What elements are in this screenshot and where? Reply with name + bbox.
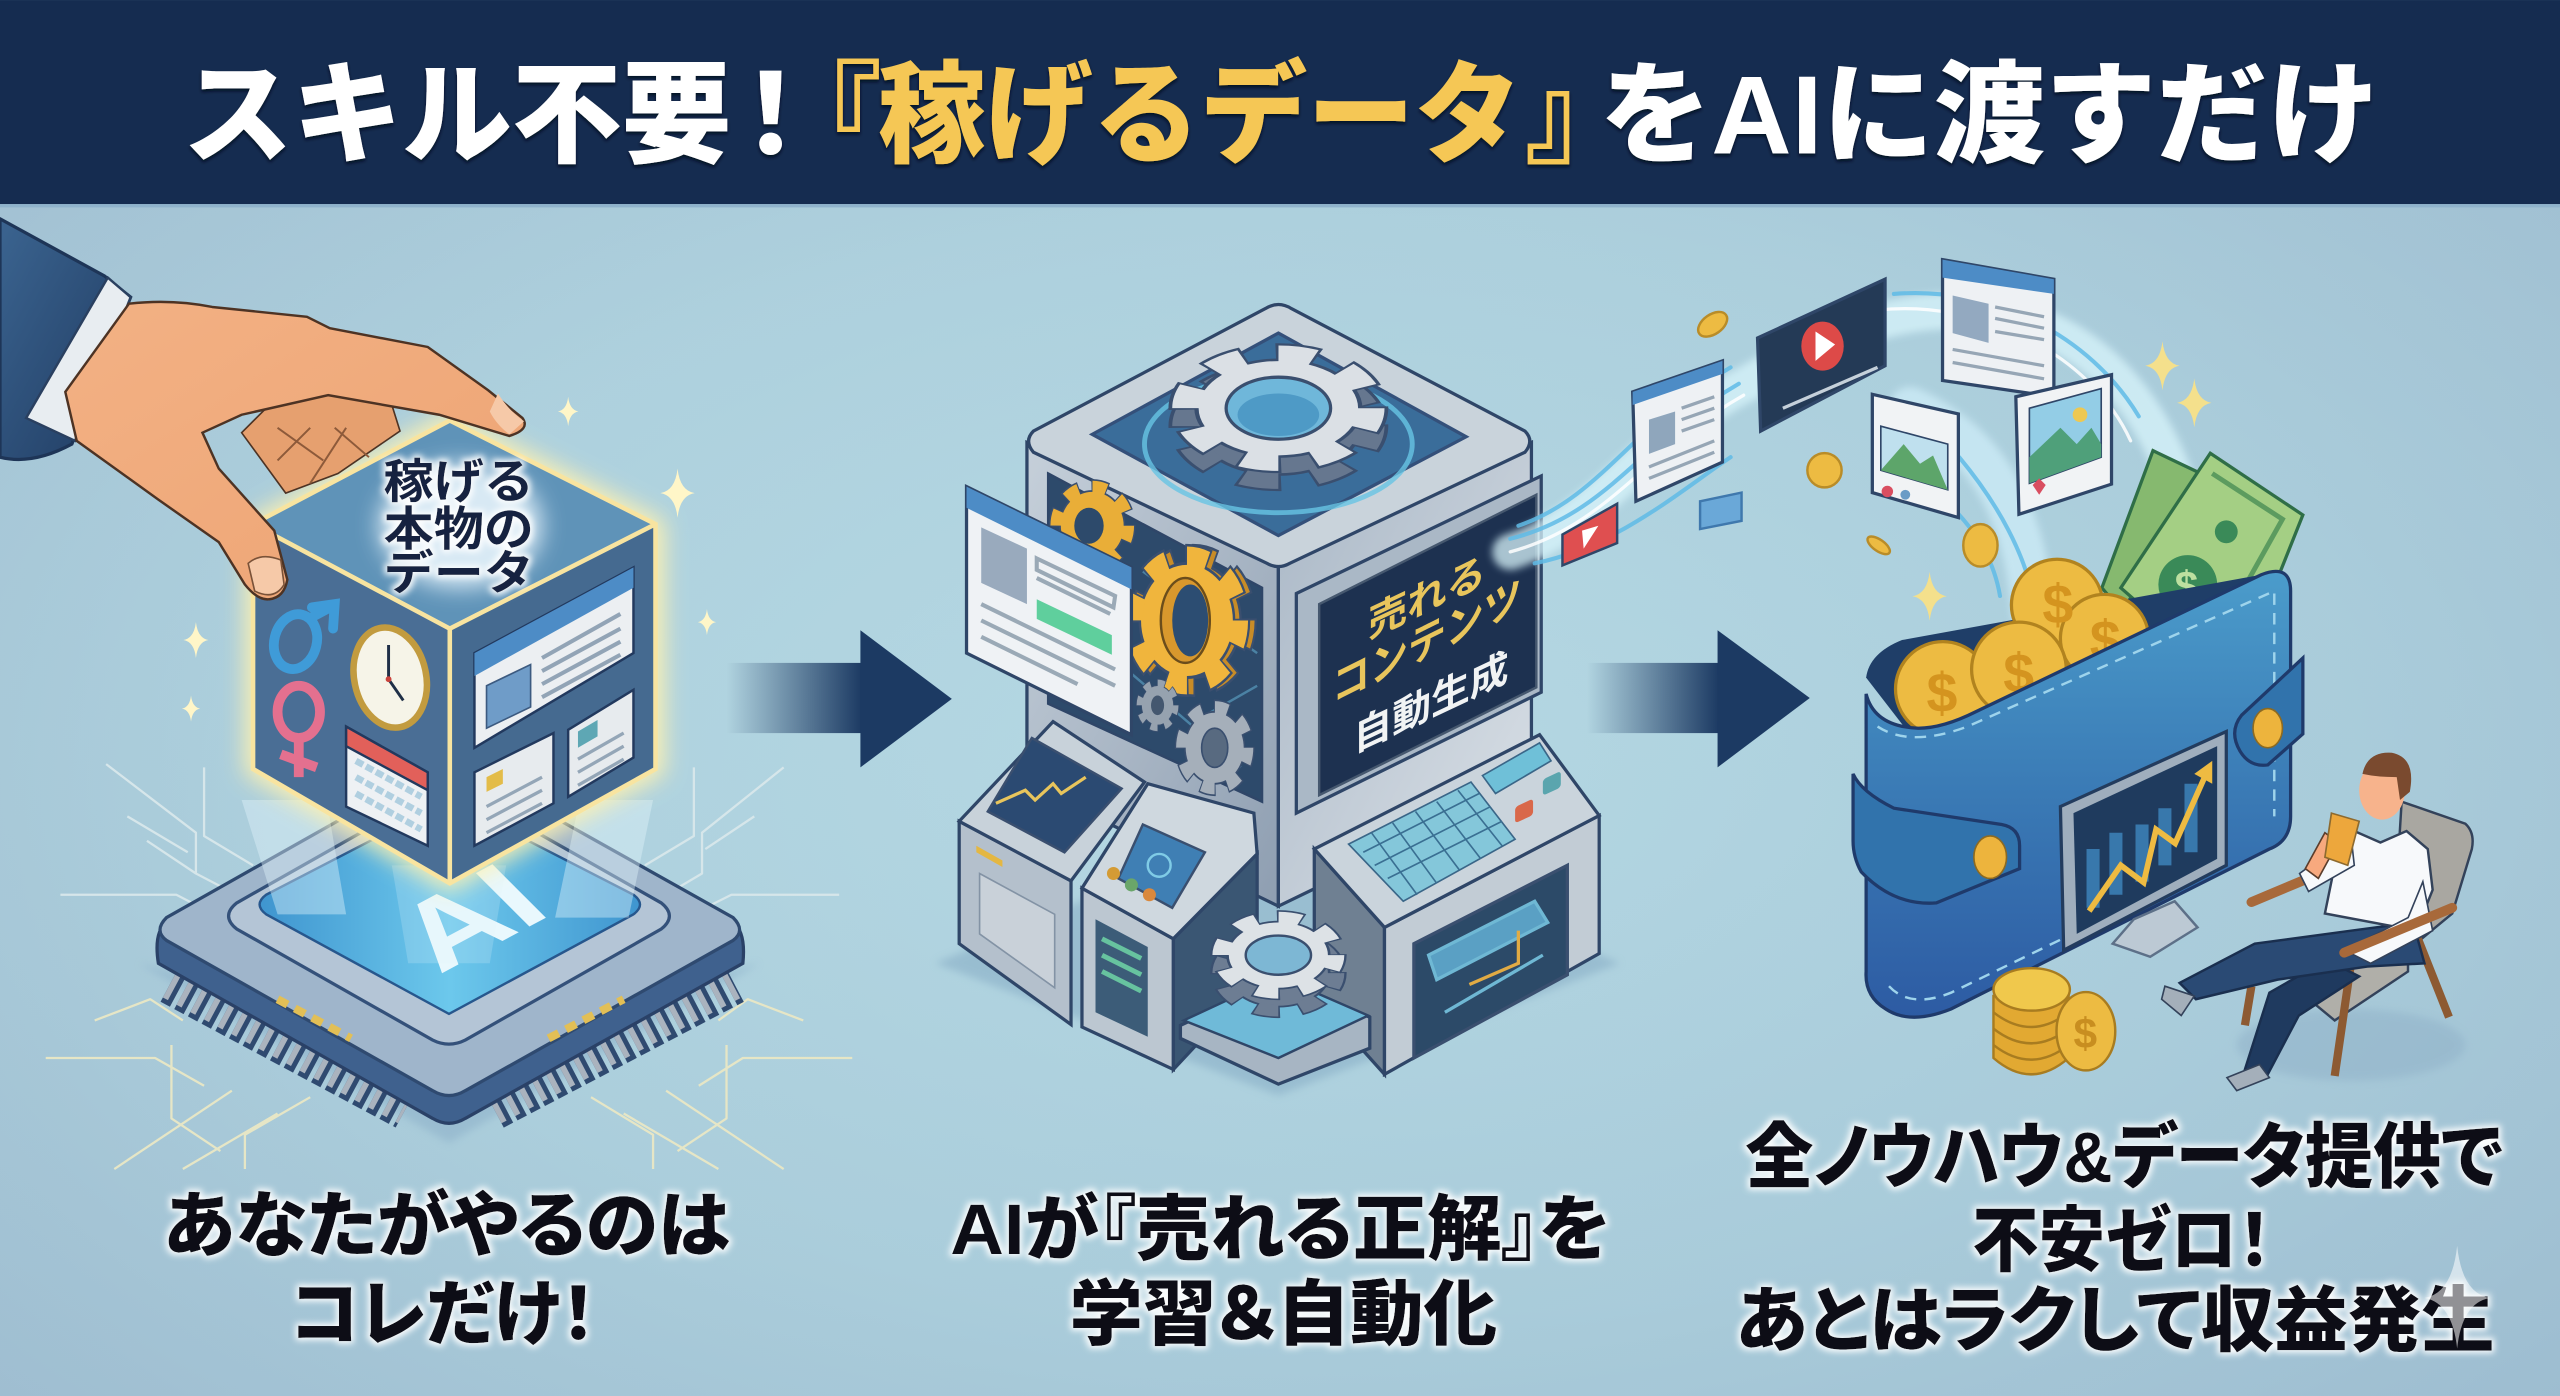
caption: step 1: あなたがやるのは [163, 1187, 730, 1267]
glass [2325, 813, 2359, 865]
coin stack [1993, 968, 2115, 1074]
cube label: 稼げる [384, 456, 534, 509]
content: small video tag [1562, 504, 1617, 565]
coin dollars: $ [2003, 642, 2034, 704]
screen text: 売れる [1368, 548, 1486, 647]
title banner [0, 0, 2560, 207]
suit sleeve [0, 219, 131, 459]
content: social image card [1872, 394, 1958, 518]
circuit traces [46, 764, 852, 1169]
wallet body [1866, 571, 2291, 1017]
caption: step 3: 全ノウハウ&データ提供で [1745, 1118, 2503, 1198]
machine window [1414, 865, 1567, 1058]
front arm sleeve [2300, 836, 2354, 891]
shirt [2325, 829, 2433, 931]
wallet strap left [1853, 774, 2020, 903]
keyboard [1349, 782, 1515, 901]
caption: step 2 [950, 1190, 1610, 1355]
bottom tray [1180, 980, 1370, 1084]
cube label [384, 456, 534, 600]
chip inner frame [229, 788, 669, 1044]
right console [1314, 735, 1599, 1074]
shirt cuff [26, 278, 131, 441]
browser window [967, 487, 1131, 735]
icon: document panel lower left [474, 733, 553, 846]
monitor stand [2113, 901, 2198, 957]
watermark sparkle [2424, 1246, 2490, 1349]
caption: step 2: AIが『売れる正解』を [950, 1190, 1610, 1270]
chip body [157, 763, 744, 1123]
wallet strap right [2235, 658, 2303, 765]
large orange gear [1134, 557, 1246, 684]
icon: male symbol [268, 604, 335, 674]
cube glow [245, 411, 664, 891]
light beams [242, 800, 653, 963]
caption: step 3: あとはラクして収益発生 [1736, 1281, 2495, 1361]
panel: step 2 content machine [936, 293, 2180, 1096]
machine tower left side [1027, 442, 1278, 906]
upper crossed leg [2180, 922, 2424, 999]
lower crossed leg [2245, 960, 2359, 1074]
machine tower right side [1278, 442, 1531, 906]
content: small blue tag [1700, 493, 1742, 529]
coin dollars [1927, 574, 2121, 724]
screen text [1332, 548, 1522, 761]
middle console [1082, 784, 1257, 1069]
left console [959, 722, 1144, 1025]
sparkles [182, 397, 716, 722]
title text: closing bracket: 』 [1525, 53, 1636, 178]
coin dollars: $ [2090, 610, 2121, 672]
armrest [2344, 908, 2452, 953]
title text: exclamation: ！ [715, 53, 826, 178]
monitor [2060, 731, 2226, 950]
hand [65, 302, 525, 599]
cube top face [253, 420, 656, 629]
content: browser card [1633, 361, 1722, 501]
man [2162, 753, 2452, 1091]
head [2359, 761, 2405, 820]
forearm [2305, 833, 2338, 878]
top gear [1187, 354, 1370, 480]
caption: step 3 [1736, 1118, 2503, 1361]
title text: opening bracket: 『 [771, 53, 882, 178]
caption: step 3: 不安ゼロ！ [1972, 1201, 2271, 1281]
back arm and hand [2344, 882, 2433, 963]
icon: female symbol [278, 686, 320, 777]
shoes [2162, 986, 2269, 1091]
title text: white tail: をAIに渡すだけ [1600, 53, 2379, 178]
data stream [1510, 293, 2180, 612]
bills: $ [2175, 563, 2198, 610]
AI on chip: AI [369, 844, 570, 992]
machine interior [1048, 474, 1262, 802]
caption: step 1 [163, 1187, 730, 1355]
machine shadow [936, 816, 1620, 1096]
icon: calendar [346, 727, 428, 846]
chip shadow [139, 963, 759, 1143]
icon: browser panel on cube [474, 567, 633, 748]
screen [1319, 495, 1536, 795]
chair [2245, 802, 2473, 1076]
caption: step 1: コレだけ！ [291, 1275, 596, 1355]
screen frame [1296, 476, 1541, 813]
title text: white lead: スキル不要 [183, 53, 731, 178]
panel: step 1 data cube, hand and AI chip [0, 219, 852, 1169]
icon: document panel lower right [568, 690, 633, 797]
arrow: step 2 to 3 [1587, 630, 1810, 767]
content: landscape card [2016, 375, 2112, 514]
floating coins [1694, 307, 1998, 567]
cube [253, 420, 656, 883]
arrow: step 1 to 2 [727, 630, 952, 767]
content: article card [1943, 260, 2054, 397]
wallet stitching [1878, 591, 2274, 999]
small grey gears [1140, 683, 1248, 788]
caption: step 2: 学習＆自動化 [1069, 1275, 1497, 1355]
chip screen [260, 800, 640, 1014]
bills [2102, 451, 2303, 622]
screen text: コンテンツ [1332, 570, 1522, 713]
cube right face [450, 524, 656, 883]
cube label: 本物の [384, 503, 534, 556]
cube label: データ [384, 547, 534, 600]
sparkles [1912, 341, 2211, 621]
content: video player [1758, 279, 1885, 431]
hair [2362, 753, 2411, 800]
wallet back opening [1866, 575, 2289, 735]
machine top plate [1029, 305, 1530, 567]
wallet coins [1896, 559, 2149, 736]
coin stack: $ [2073, 1010, 2097, 1057]
coin dollars: $ [2042, 574, 2073, 636]
machine top recess [1092, 333, 1466, 536]
screen text: 自動生成 [1353, 645, 1509, 761]
icon: clock [345, 621, 436, 735]
title text: gold highlight: 稼げるデータ [878, 53, 1522, 178]
man's shadow [2237, 1009, 2465, 1081]
panel: step 3 wallet, content and relaxing man [1562, 260, 2473, 1091]
chip pins [170, 985, 735, 1110]
tray surface [1184, 976, 1368, 1058]
bottom gear [1221, 918, 1335, 1011]
coin dollars: $ [1927, 662, 1958, 724]
small orange gear [1056, 487, 1128, 565]
cube left face [253, 524, 450, 883]
